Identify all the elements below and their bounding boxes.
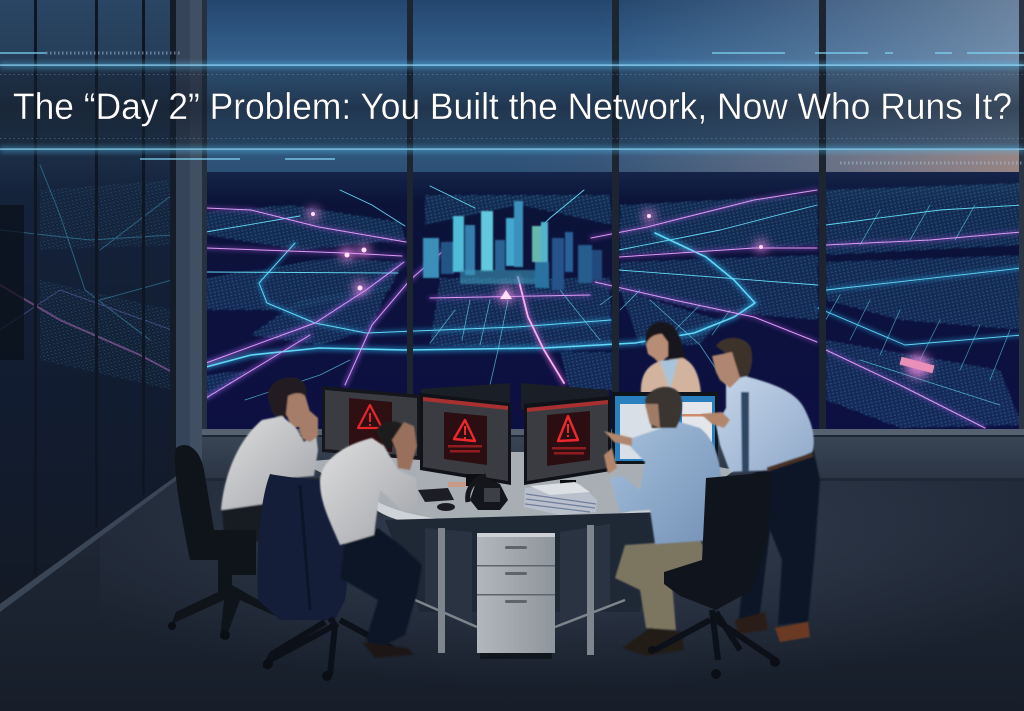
curved desk [300,452,735,655]
person: man with head in hands [320,421,422,658]
monitor backs, center [421,383,609,410]
crisp network roads: pink [206,190,1022,428]
desk items: keyboard, phone and papers [418,476,508,511]
person: seated man in blue shirt pointing [604,387,722,656]
monitor: far left with alert [322,386,420,460]
suburb light clusters [206,183,1022,428]
person: standing man in light blue shirt [701,338,820,642]
title banner [0,53,1024,163]
person: left man seated, hand on chin [221,377,318,545]
window frame mullions [190,0,1024,437]
left glass partition with reflected city [0,0,202,612]
monitor: bright blue screen [612,392,718,464]
filing cabinet [477,533,555,659]
alert hotspots [307,208,930,378]
window: sky [190,0,1024,176]
person: woman in beige standing behind desk [641,322,701,395]
chair: left office chair [168,445,280,640]
city skyline towers [423,201,602,290]
blurred network glow [206,190,1022,428]
stack of paper files [524,482,597,515]
banner glow lines [0,53,1024,163]
chair with navy jacket [258,474,395,681]
monitor: center with alert [420,393,511,486]
monitor: right with alert [524,396,611,488]
window: night city network map [204,172,1022,432]
crisp network roads: cyan [206,186,1022,420]
chair: right office chair in front of seated man [648,472,780,679]
